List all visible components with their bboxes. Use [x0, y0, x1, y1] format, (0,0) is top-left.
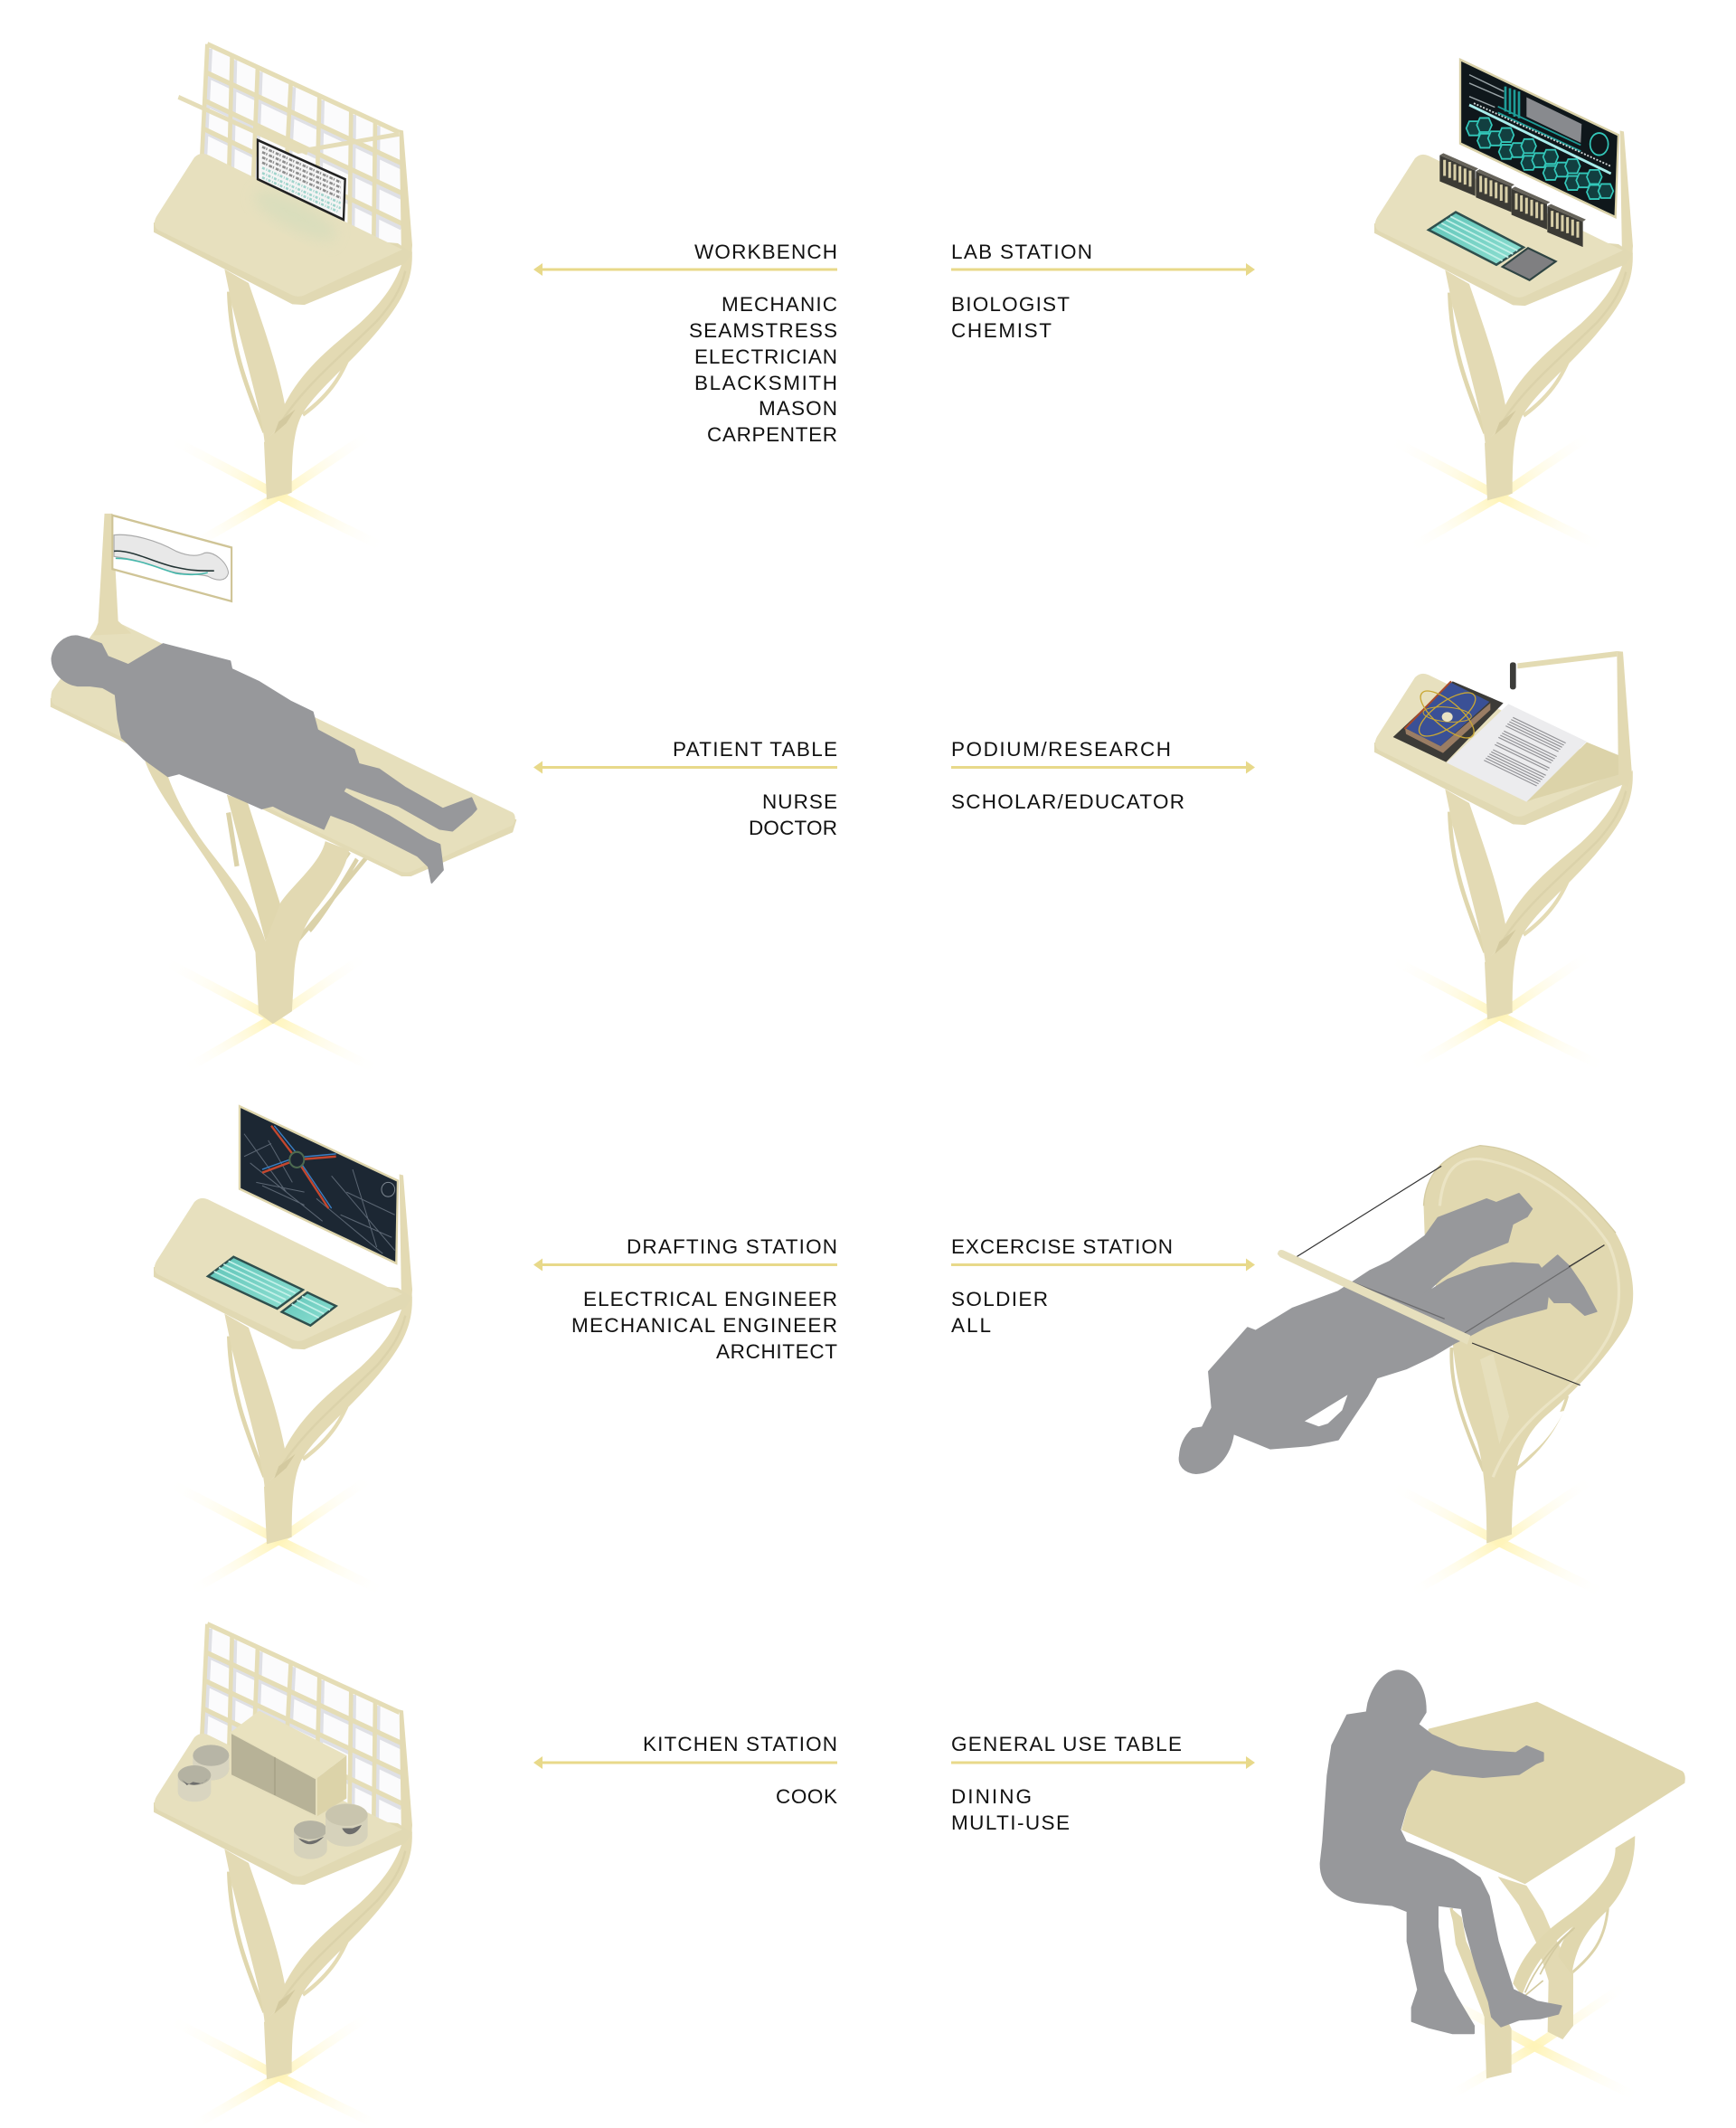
pedestal: podium — [1374, 674, 1633, 1019]
occupations — [689, 293, 837, 446]
patient table illustration — [51, 514, 516, 1071]
podium illustration — [1374, 651, 1633, 1068]
workbench illustration — [154, 44, 412, 548]
label row 4 right: general use table — [951, 1733, 1255, 1834]
occupations — [571, 1288, 837, 1363]
keyboard — [1429, 213, 1524, 265]
label row 1 left: workbench — [533, 241, 837, 446]
screen: lab — [1460, 60, 1618, 217]
ground glow: workbench — [168, 432, 385, 548]
silhouette: seated person — [1321, 1670, 1561, 2033]
occupations: BIOLOGIST — [951, 293, 1070, 316]
ground glow: patient table — [163, 955, 380, 1071]
ground glow: general table — [1424, 1983, 1641, 2099]
heading: PATIENT TABLE — [673, 738, 837, 761]
patient table top — [51, 514, 516, 876]
occupations: ALL — [951, 1314, 991, 1337]
heading: KITCHEN STATION — [643, 1733, 837, 1755]
open paper page — [1447, 704, 1587, 802]
cabinet — [231, 1711, 346, 1817]
front pots — [178, 1765, 368, 1859]
occupations: MECHANIC — [722, 293, 837, 316]
pedestal and upright panel — [1424, 1146, 1633, 1544]
pedestal: drafting — [154, 1174, 412, 1544]
occupations: ELECTRICIAN — [694, 345, 837, 368]
occupations: ARCHITECT — [716, 1340, 837, 1363]
square table top — [1401, 1702, 1685, 1884]
lab station illustration — [1374, 60, 1633, 549]
label row 2 left: patient table — [533, 738, 837, 839]
arrow right — [951, 1756, 1255, 1769]
occupations: DINING — [951, 1785, 1032, 1808]
lamp post and arm — [1510, 651, 1632, 787]
ground glow: lab — [1389, 433, 1606, 549]
occupations: CHEMIST — [951, 319, 1052, 342]
keyboard — [208, 1257, 303, 1309]
test tube racks — [1439, 153, 1586, 247]
sloped reading wedge — [1526, 742, 1618, 802]
desk instruments: lab — [1429, 153, 1586, 280]
lamp arm: workbench — [178, 97, 400, 153]
occupations: BLACKSMITH — [694, 372, 837, 394]
silhouette: person exercising — [1180, 1194, 1597, 1473]
occupations: MULTI-USE — [951, 1811, 1070, 1834]
arrow left — [533, 1756, 837, 1769]
label row 3 right: exercise station — [951, 1235, 1255, 1337]
occupations: COOK — [776, 1785, 837, 1808]
label row 2 right: podium — [951, 738, 1255, 813]
silhouette: patient lying down — [52, 637, 476, 883]
occupations: DOCTOR — [749, 817, 837, 839]
label row 4 left: kitchen station — [533, 1733, 837, 1808]
table legs and branches — [1451, 1836, 1635, 2078]
heading: LAB STATION — [951, 241, 1092, 263]
pedestal: patient table — [144, 759, 366, 1024]
arrow left — [533, 761, 837, 774]
heading: EXCERCISE STATION — [951, 1235, 1173, 1258]
ground glow: podium — [1389, 952, 1606, 1068]
heading: WORKBENCH — [694, 241, 837, 263]
occupations — [749, 790, 837, 839]
book — [1404, 681, 1490, 753]
occupations: CARPENTER — [707, 423, 837, 446]
body scan monitor — [112, 515, 231, 601]
occupations: SOLDIER — [951, 1288, 1048, 1310]
book tray — [1393, 681, 1504, 762]
occupations — [951, 1288, 1048, 1337]
kitchen station illustration — [154, 1624, 412, 2128]
occupations: MASON — [759, 397, 837, 420]
rear pots — [193, 1745, 229, 1780]
pedestal: lab — [1374, 130, 1633, 500]
label row 1 right: lab station — [951, 241, 1255, 342]
occupations: ELECTRICAL ENGINEER — [583, 1288, 837, 1310]
ground glow: drafting — [168, 1477, 385, 1593]
drafting station illustration — [154, 1106, 412, 1593]
resistance cables — [1297, 1166, 1604, 1386]
occupations: MECHANICAL ENGINEER — [571, 1314, 837, 1337]
pedestal: kitchen — [154, 1624, 412, 2079]
arrow left — [533, 263, 837, 276]
wall monitor: workbench — [258, 140, 345, 220]
general use table illustration — [1321, 1670, 1685, 2099]
heading: GENERAL USE TABLE — [951, 1733, 1182, 1755]
occupations: SEAMSTRESS — [689, 319, 837, 342]
ground glow: kitchen — [168, 2013, 385, 2128]
ground glow: exercise — [1389, 1479, 1606, 1594]
hexagon cluster — [1467, 118, 1613, 199]
occupations: NURSE — [762, 790, 837, 813]
exercise station illustration — [1180, 1146, 1633, 1594]
pedestal: workbench — [154, 44, 412, 499]
occupations — [951, 293, 1070, 342]
occupations — [951, 1785, 1070, 1834]
occupations: SCHOLAR/EDUCATOR — [951, 790, 1184, 813]
pull bar — [1278, 1250, 1470, 1345]
label row 3 left: drafting station — [533, 1235, 837, 1363]
heading: DRAFTING STATION — [627, 1235, 837, 1258]
arrow left — [533, 1259, 837, 1272]
trackpad — [1503, 248, 1556, 280]
arrow right — [951, 263, 1255, 276]
heading: PODIUM/RESEARCH — [951, 738, 1171, 761]
trackpad — [282, 1292, 336, 1326]
arrow right — [951, 1259, 1255, 1272]
screen: road plan — [240, 1106, 398, 1263]
arrow right — [951, 761, 1255, 774]
